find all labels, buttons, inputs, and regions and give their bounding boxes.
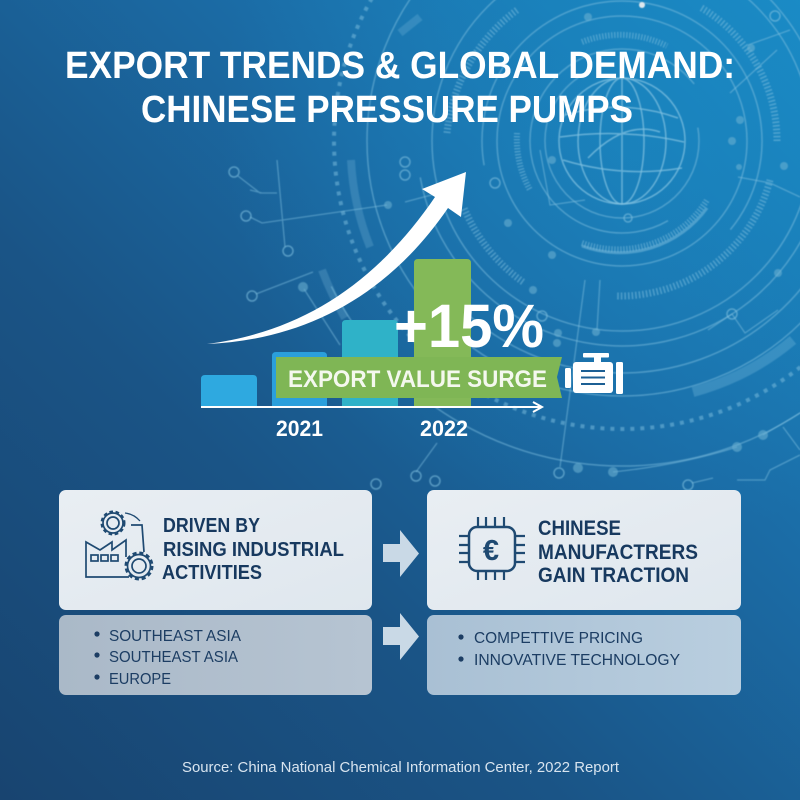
heading: [538, 517, 698, 587]
heading: ACTIVITIES: [162, 561, 262, 584]
title: EXPORT TRENDS & GLOBAL DEMAND:: [65, 45, 735, 87]
arrow: bottom connector: [383, 613, 419, 660]
circuit and globe backdrop: [178, 0, 800, 585]
panel: regions list: [59, 615, 372, 695]
heading: [162, 514, 344, 584]
heading: RISING INDUSTRIAL: [163, 538, 344, 561]
circuit traces: [238, 30, 800, 483]
banner: export value surge: [276, 357, 562, 398]
bar chart: [201, 259, 542, 441]
year labels: 2022: [420, 416, 468, 441]
year labels: 2021: [276, 416, 323, 441]
axis arrow: [201, 402, 542, 412]
panel: regions list: EUROPE: [109, 671, 171, 688]
icon: chip with euro: €: [483, 535, 499, 567]
heading: MANUFACTRERS: [538, 541, 698, 564]
title: [65, 45, 735, 131]
heading: GAIN TRACTION: [538, 564, 689, 587]
heading: DRIVEN BY: [163, 514, 260, 537]
panel: industrial activities: [59, 490, 372, 610]
icon: factory with gears: [86, 512, 152, 579]
icon: globe: [559, 78, 685, 204]
panel: advantages list: INNOVATIVE TECHNOLOGY: [474, 652, 680, 669]
panel: advantages list: COMPETTIVE PRICING: [474, 630, 643, 647]
icon: pump: [565, 353, 623, 394]
growth arrow: [207, 172, 466, 344]
title: CHINESE PRESSURE PUMPS: [141, 89, 633, 131]
icon: chip with euro: [459, 517, 525, 580]
panel: regions list: SOUTHEAST ASIA: [109, 649, 238, 666]
callout: +15%: +15%: [394, 292, 544, 360]
banner: export value surge: EXPORT VALUE SURGE: [288, 366, 547, 393]
panel: advantages list: [427, 615, 741, 695]
source line: Source: China National Chemical Information Center, 2022 Report: [182, 760, 619, 776]
heading: CHINESE: [538, 517, 621, 540]
panel: manufacturers: [427, 490, 741, 610]
arrow: top connector: [383, 530, 419, 577]
year labels: [276, 416, 468, 441]
panel: regions list: SOUTHEAST ASIA: [109, 628, 241, 645]
